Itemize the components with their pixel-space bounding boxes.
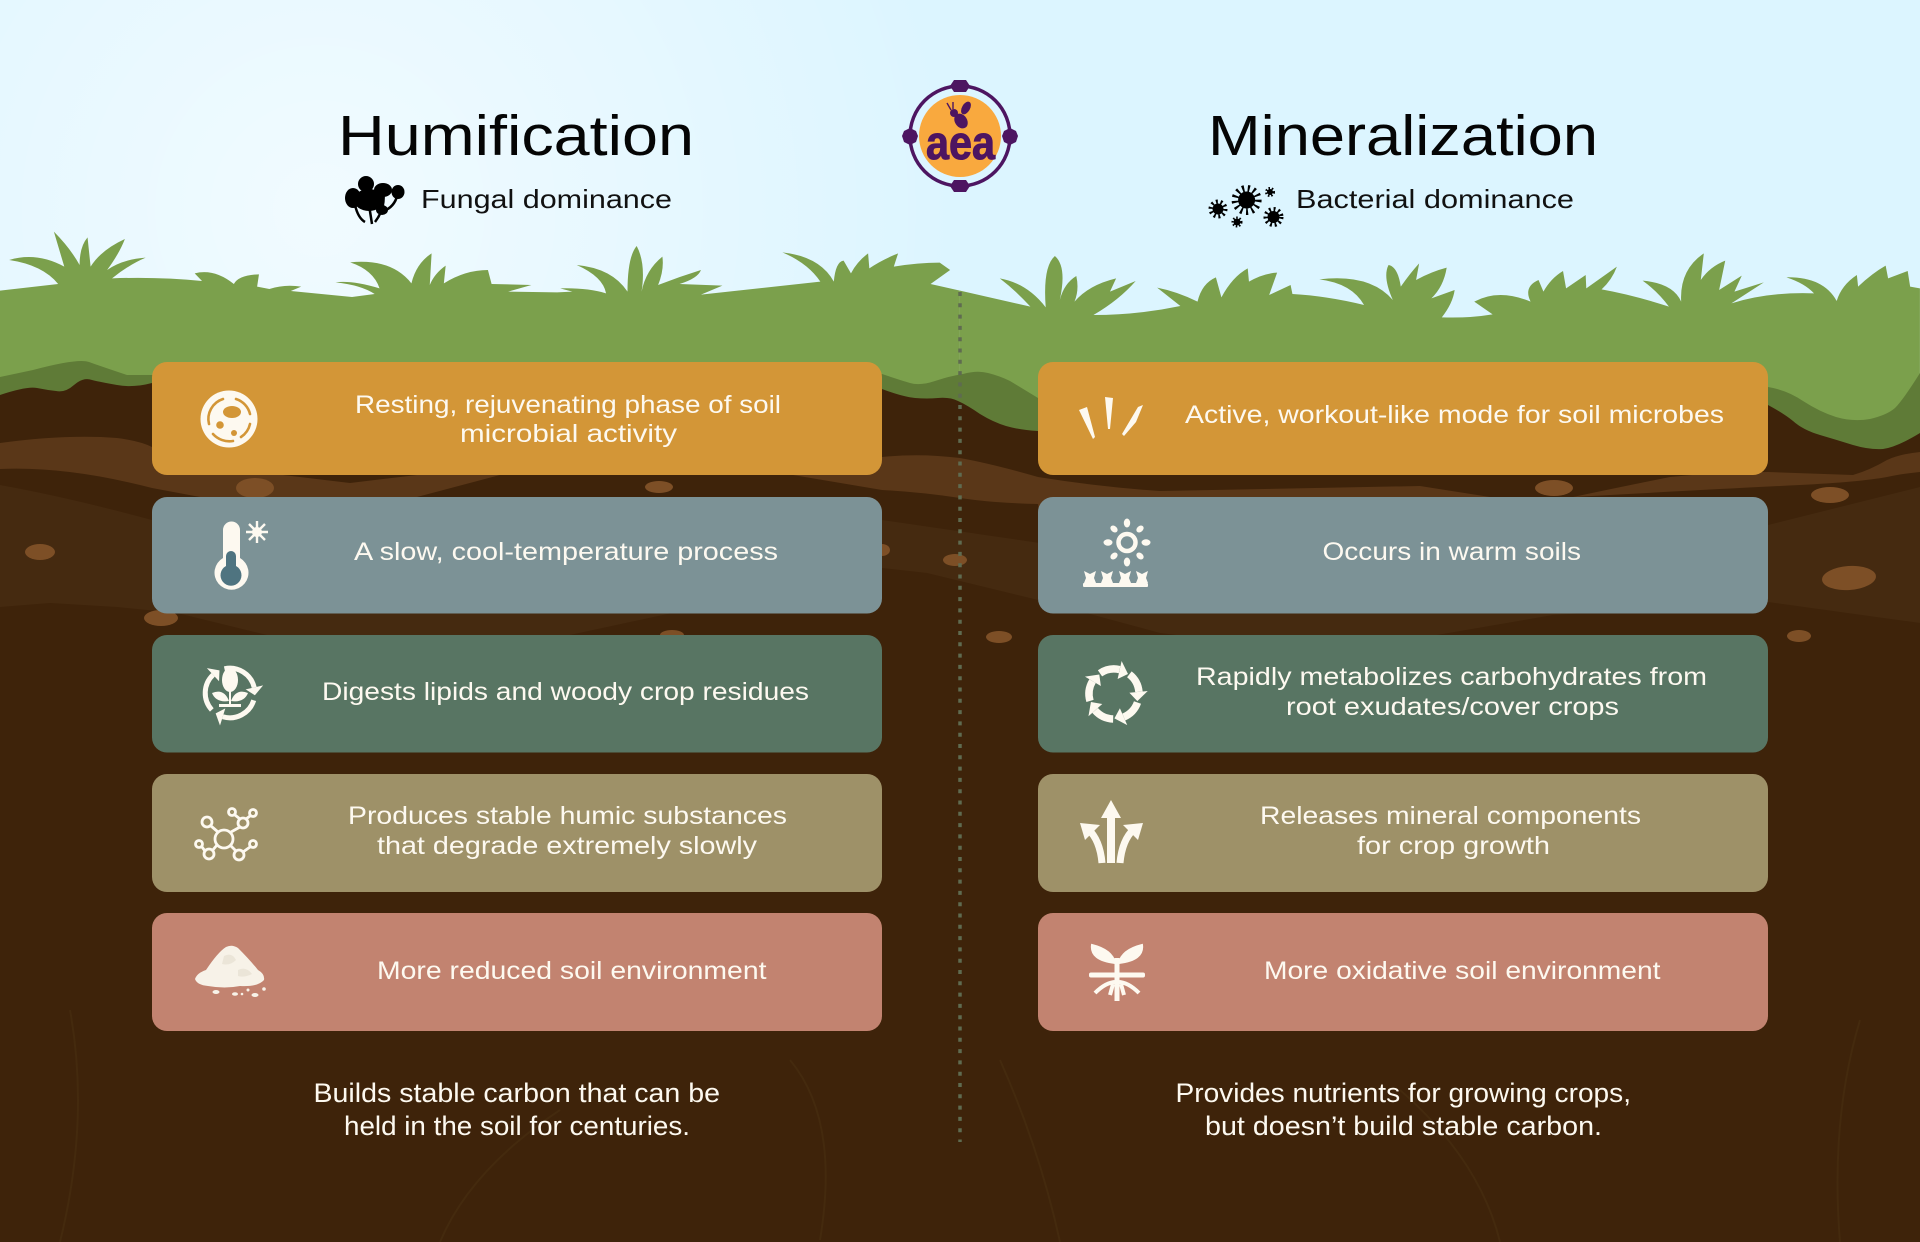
text: root exudates/cover crops xyxy=(1286,693,1619,721)
card: slow process xyxy=(152,497,882,614)
text: for crop growth xyxy=(1357,832,1550,860)
icon: cycle arrows xyxy=(1083,661,1150,729)
icon: powder pile xyxy=(195,946,266,997)
summary: humification: Builds stable carbon that can be xyxy=(314,1078,720,1108)
icon: plant with roots xyxy=(1089,945,1145,1001)
icon: action spikes xyxy=(1079,397,1143,439)
icon: molecule xyxy=(196,808,256,860)
card: resting phase xyxy=(152,362,882,475)
logo: aea: aea xyxy=(926,116,996,169)
summary: mineralization: Provides nutrients for growing crops, xyxy=(1176,1078,1631,1108)
text: that degrade extremely slowly xyxy=(377,832,758,860)
card: oxidative environment xyxy=(1038,913,1768,1031)
text: microbial activity xyxy=(460,420,678,448)
central dotted divider xyxy=(958,292,962,1142)
card: mineral components xyxy=(1038,774,1768,892)
text: Releases mineral components xyxy=(1260,802,1641,830)
summary: humification: held in the soil for centuries. xyxy=(344,1111,690,1141)
text: More reduced soil environment xyxy=(377,957,767,985)
text xyxy=(355,391,781,448)
text xyxy=(1260,802,1641,860)
text: A slow, cool-temperature process xyxy=(354,538,778,566)
text: Rapidly metabolizes carbohydrates from xyxy=(1196,663,1707,691)
subheading: fungal dominance: Fungal dominance xyxy=(421,184,672,214)
text: Active, workout-like mode for soil microbes xyxy=(1185,401,1724,429)
card: humic substances xyxy=(152,774,882,892)
panel: humification header xyxy=(338,104,694,224)
card: digests lipids xyxy=(152,635,882,752)
text: More oxidative soil environment xyxy=(1264,957,1661,985)
icon: three arrows up xyxy=(1080,800,1143,863)
icon: bacteria xyxy=(1211,188,1281,226)
icon: recycling plant xyxy=(203,662,263,725)
text xyxy=(1196,663,1707,721)
text: Digests lipids and woody crop residues xyxy=(322,678,809,706)
icon: petri dish xyxy=(200,390,258,448)
card: active mode xyxy=(1038,362,1768,475)
soil stones xyxy=(25,478,1877,643)
text: Produces stable humic substances xyxy=(348,802,787,830)
panel: mineralization header xyxy=(1208,104,1598,226)
icon: sun over soil xyxy=(1083,518,1150,587)
card: metabolizes carbohydrates xyxy=(1038,635,1768,752)
sky background xyxy=(0,0,1920,480)
summary: humification xyxy=(314,1078,720,1141)
text: Resting, rejuvenating phase of soil xyxy=(355,391,781,419)
logo: aea xyxy=(902,80,1018,192)
summary: mineralization xyxy=(1176,1078,1631,1141)
card: reduced environment xyxy=(152,913,882,1031)
text: Occurs in warm soils xyxy=(1322,538,1581,566)
heading: Humification: Humification xyxy=(338,104,694,168)
icon: thermometer xyxy=(214,521,268,590)
subheading: bacterial dominance: Bacterial dominance xyxy=(1296,184,1574,214)
text xyxy=(348,802,787,860)
summary: mineralization: but doesn’t build stable carbon. xyxy=(1205,1111,1602,1141)
card: warm soils xyxy=(1038,497,1768,614)
icon: mushrooms xyxy=(345,176,404,224)
heading: Mineralization: Mineralization xyxy=(1208,104,1598,168)
